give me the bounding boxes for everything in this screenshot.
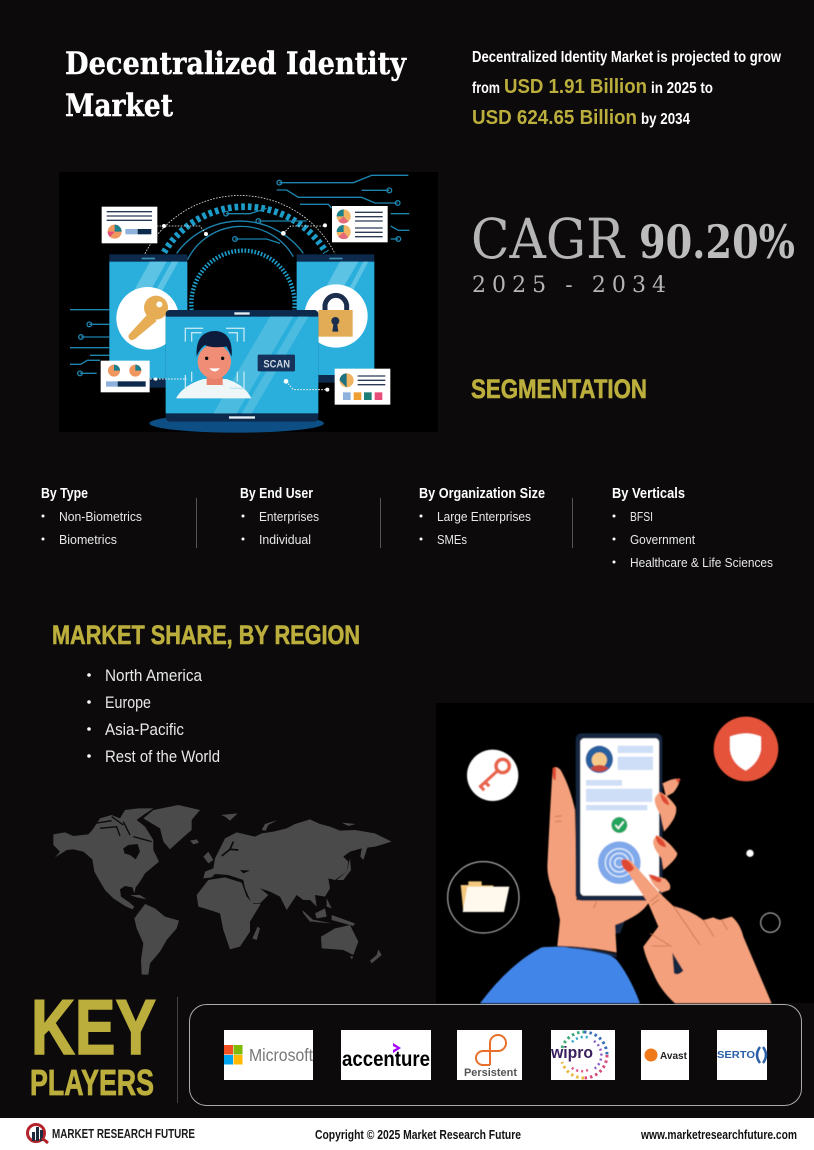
- market projection text: from: [472, 80, 500, 97]
- logo: wipro: wipro: [550, 1043, 593, 1062]
- segment: by type: By Type: [41, 486, 88, 502]
- footer logo: [28, 1124, 195, 1143]
- footer bar: [0, 1118, 814, 1150]
- logo: accenture: [341, 1030, 431, 1080]
- segment: by organization size: SMEs: [437, 532, 467, 547]
- segment: by end user: [240, 486, 319, 547]
- cagr value: 2025 - 2034: [472, 273, 666, 298]
- eurasia africa australia: [197, 813, 392, 963]
- key players panel: [190, 1004, 802, 1106]
- cagr value: [471, 207, 795, 298]
- segment: by type: Biometrics: [59, 532, 117, 547]
- segment: by end user: Enterprises: [259, 509, 319, 524]
- segment: by verticals: BFSI: [630, 509, 653, 524]
- logo: avast: Avast: [660, 1050, 687, 1062]
- region list: Rest of the World: [105, 747, 220, 766]
- segment: by type: Non-Biometrics: [59, 509, 142, 524]
- segment: by end user: By End User: [240, 486, 313, 502]
- market projection text: [472, 49, 782, 129]
- region list: Asia-Pacific: [105, 720, 184, 739]
- segment: by verticals: [612, 486, 773, 570]
- illustration: phone and hand: [436, 703, 814, 1003]
- segment: by type: [41, 486, 142, 547]
- logo: serto: SERTO: [717, 1050, 755, 1061]
- market projection text: by 2034: [641, 111, 690, 128]
- segment: by organization size: [419, 486, 545, 547]
- logo: wipro: [550, 1030, 615, 1080]
- region list: North America: [105, 666, 202, 685]
- logo: accenture: accenture: [342, 1048, 430, 1071]
- americas and greenland: [53, 805, 200, 975]
- heading: segmentation: SEGMENTATION: [471, 374, 647, 404]
- title: Decentralized Identity: [65, 46, 407, 82]
- heading: key players: KEY: [31, 983, 156, 1071]
- logo: persistent: Persistent: [464, 1067, 517, 1079]
- market projection text: USD 624.65 Billion: [472, 106, 637, 129]
- segment: by verticals: Healthcare & Life Sciences: [630, 555, 773, 570]
- world map: [53, 805, 392, 975]
- heading: key players: [30, 983, 156, 1103]
- market projection text: USD 1.91 Billion: [504, 75, 647, 98]
- logo: serto: [717, 1030, 767, 1080]
- title: Market: [65, 88, 174, 124]
- segment: by organization size: By Organization Size: [419, 486, 545, 502]
- footer logo: MARKET RESEARCH FUTURE: [52, 1126, 195, 1141]
- logo: persistent: [457, 1030, 522, 1080]
- logo: microsoft: Microsoft: [249, 1045, 313, 1065]
- cagr value: CAGR: [471, 207, 625, 271]
- heading: key players: PLAYERS: [30, 1062, 154, 1103]
- logo: microsoft: [224, 1030, 313, 1080]
- segment: by organization size: Large Enterprises: [437, 509, 531, 524]
- copyright: Copyright © 2025 Market Research Future: [315, 1127, 521, 1142]
- region list: [87, 666, 220, 766]
- segment: by verticals: By Verticals: [612, 486, 685, 502]
- logo: avast: [641, 1030, 689, 1080]
- segment: by verticals: Government: [630, 532, 695, 547]
- heading: market share by region: MARKET SHARE, BY REGION: [52, 620, 360, 650]
- illustration: digital identity laptops: [59, 172, 438, 433]
- title: [65, 46, 407, 124]
- region list: Europe: [105, 693, 151, 712]
- market projection text: in 2025 to: [651, 80, 713, 97]
- segment: by end user: Individual: [259, 532, 311, 547]
- illustration: digital identity laptops: SCAN: [263, 358, 290, 370]
